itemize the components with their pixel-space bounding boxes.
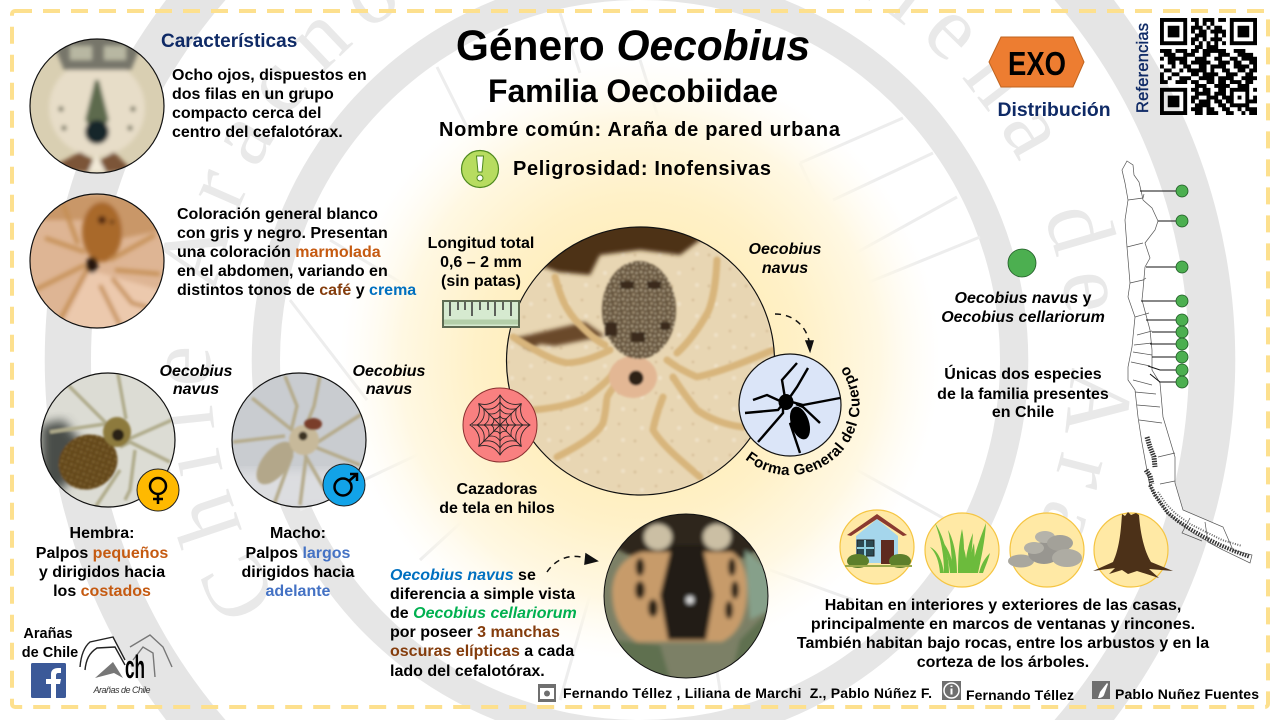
photo: colouration bbox=[30, 194, 164, 330]
text: male: Palpos largos bbox=[246, 545, 350, 562]
photo outline: cephalothorax bbox=[604, 514, 768, 678]
map markers bbox=[1176, 185, 1188, 388]
text: female: Palpos pequeños bbox=[36, 545, 168, 562]
icon: body shape bbox=[739, 354, 841, 456]
note: only species: de la familia presentes bbox=[937, 386, 1109, 403]
text: male: Macho: bbox=[270, 525, 326, 542]
arrow: to body shape bbox=[775, 314, 813, 351]
badge: EXO: EXO bbox=[1008, 45, 1066, 82]
text: comparison: Oecobius navus se bbox=[390, 567, 536, 584]
text: colouration: con gris y negro. Presentan bbox=[177, 225, 388, 242]
panel: credits bbox=[538, 681, 1259, 703]
legend text: Oecobius navus y bbox=[955, 290, 1091, 307]
abdomen bbox=[602, 261, 676, 359]
panel: male bbox=[232, 363, 426, 600]
icon: danger exclamation bbox=[462, 150, 498, 188]
icon: house bbox=[840, 510, 914, 584]
text: female: los costados bbox=[53, 583, 151, 600]
arrow: to photo bbox=[547, 554, 597, 572]
label: species female: navus bbox=[173, 381, 219, 398]
text: female: Hembra: bbox=[70, 525, 134, 542]
logo: Arañas de Chile: ch bbox=[125, 649, 145, 685]
text: male: dirigidos hacia bbox=[242, 564, 355, 581]
map connector lines bbox=[1140, 191, 1182, 382]
panel: female bbox=[36, 363, 233, 600]
photo outline: male bbox=[232, 373, 366, 507]
icon: info bbox=[942, 681, 961, 700]
icon: male symbol bbox=[323, 464, 365, 506]
text: eyes: centro del cefalotórax. bbox=[172, 124, 343, 141]
panel: habitat bbox=[797, 510, 1209, 671]
text: male: adelante bbox=[266, 583, 331, 600]
panel: status and references bbox=[989, 20, 1257, 121]
text: comparison: por poseer 3 manchas bbox=[390, 624, 560, 641]
heading: características: Características bbox=[161, 31, 297, 52]
note: only species: en Chile bbox=[992, 404, 1054, 421]
text: habitat: Habitan en interiores y exteriores de las casas, bbox=[825, 597, 1181, 614]
text: habitat: principalmente en marcos de ventanas y rincones. bbox=[811, 616, 1195, 633]
note: only species: Únicas dos especies bbox=[944, 364, 1102, 383]
logo: Arañas de Chile bbox=[80, 635, 172, 695]
credit: photos: Fernando Téllez , Liliana de Marchi Z., Pablo Núñez F. bbox=[563, 685, 932, 701]
icon: facebook bbox=[31, 663, 66, 698]
central glow bbox=[340, 60, 940, 660]
danger level: Peligrosidad: Inofensivas bbox=[513, 158, 771, 180]
text: comparison: oscuras elípticas a cada bbox=[390, 643, 574, 660]
heading: distribution: Distribución bbox=[997, 99, 1111, 121]
label: species male: navus bbox=[366, 381, 412, 398]
text: comparison: lado del cefalotórax. bbox=[390, 663, 545, 680]
text: habitat: También habitan bajo rocas, entre los arbustos y en la bbox=[797, 635, 1209, 652]
icon: ruler bbox=[443, 301, 519, 327]
title: Género Oecobius bbox=[456, 23, 810, 70]
photo: cephalothorax bbox=[600, 510, 770, 680]
QR code bbox=[1160, 20, 1257, 113]
label: species female: Oecobius bbox=[160, 363, 233, 380]
photo outline: female bbox=[41, 373, 175, 507]
label: hunters: Cazadoras bbox=[457, 481, 538, 498]
icon: camera bbox=[538, 684, 556, 702]
credit: illustration: Pablo Nuñez Fuentes bbox=[1115, 686, 1259, 702]
text: female: y dirigidos hacia bbox=[39, 564, 165, 581]
common name: Nombre común: Araña de pared urbana bbox=[439, 119, 841, 141]
label: Arañas de Chile: de Chile bbox=[22, 645, 78, 661]
label: Arañas de Chile: Arañas bbox=[23, 626, 73, 642]
panel: characteristics bbox=[30, 31, 416, 330]
text: eyes: Ocho ojos, dispuestos en bbox=[172, 67, 367, 84]
text: comparison: diferencia a simple vista bbox=[390, 586, 575, 603]
photo: female bbox=[41, 373, 175, 518]
family name: Familia Oecobiidae bbox=[488, 73, 778, 109]
photo: eyes bbox=[30, 36, 164, 173]
icon: rocks bbox=[1008, 513, 1084, 587]
text: eyes: dos filas en un grupo bbox=[172, 86, 334, 103]
text: habitat: corteza de los árboles. bbox=[917, 654, 1089, 671]
photo: main spider bbox=[506, 217, 774, 495]
logo: Arañas de Chile: Arañas de Chile bbox=[92, 685, 150, 695]
label: references: Referencias bbox=[1134, 23, 1152, 113]
label: length: 0,6 – 2 mm bbox=[440, 254, 522, 271]
icon: tree stump bbox=[1093, 512, 1173, 587]
icon: brush bbox=[1092, 681, 1110, 699]
text: colouration: Coloración general blanco bbox=[177, 206, 378, 223]
label: length: (sin patas) bbox=[441, 273, 521, 290]
credit: text: Fernando Téllez bbox=[966, 687, 1074, 703]
label: species main: navus bbox=[762, 260, 808, 277]
text: colouration: distintos tonos de café y crema bbox=[177, 282, 416, 299]
icon: grass bbox=[925, 513, 999, 587]
icon: spider web bbox=[463, 388, 537, 462]
panel: distribution map bbox=[937, 161, 1252, 563]
text: comparison: de Oecobius cellariorum bbox=[390, 605, 577, 622]
photo outline: main spider bbox=[506, 227, 774, 495]
legend marker bbox=[1008, 249, 1036, 277]
label: species male: Oecobius bbox=[353, 363, 426, 380]
label: body shape: Forma General del Cuerpo bbox=[746, 367, 860, 476]
text: eyes: compacto cerca del bbox=[172, 105, 321, 122]
panel: social logos bbox=[22, 626, 172, 698]
badge: EXO bbox=[989, 37, 1084, 87]
label: length: Longitud total bbox=[428, 235, 534, 252]
map of Chile bbox=[1122, 161, 1252, 563]
legend text: Oecobius cellariorum bbox=[941, 309, 1105, 326]
icon: female symbol bbox=[137, 469, 179, 511]
text: colouration: en el abdomen, variando en bbox=[177, 263, 388, 280]
label: species main: Oecobius bbox=[749, 241, 822, 258]
photo: male bbox=[232, 373, 366, 510]
panel: species comparison bbox=[390, 510, 770, 680]
label: hunters: de tela en hilos bbox=[439, 500, 555, 517]
text: colouration: una coloración marmolada bbox=[177, 244, 381, 261]
photo outline: eyes bbox=[30, 39, 164, 173]
photo outline: colouration bbox=[30, 194, 164, 328]
